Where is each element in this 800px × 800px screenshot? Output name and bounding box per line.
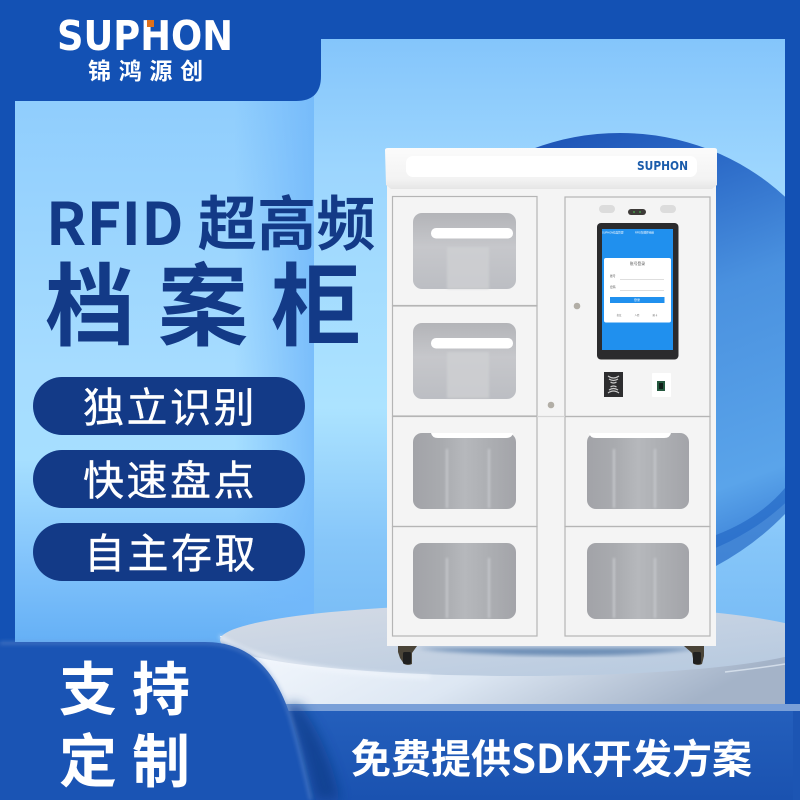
bottom left drawer window — [413, 543, 516, 619]
login dialog: 账号登录 — [630, 261, 645, 267]
cabinet — [385, 148, 717, 665]
bottom banner — [280, 704, 800, 800]
login dialog: 指纹 — [617, 313, 622, 317]
bottom right drawer window — [587, 543, 689, 619]
third left drawer window — [413, 433, 516, 509]
customization label line 1: 支持 — [59, 643, 205, 727]
login dialog: 刷卡 — [653, 313, 658, 317]
cabinet header — [385, 148, 717, 189]
feature pill: fast inventory — [33, 447, 305, 508]
login dialog: 人脸 — [635, 313, 640, 317]
login dialog: 密码 — [610, 285, 616, 289]
login dialog: 账号 — [610, 274, 616, 278]
fingerprint scanner — [652, 373, 671, 397]
touch screen — [597, 223, 678, 360]
logo: SUPHON wordmark: SUPHON — [57, 12, 233, 60]
login dialog: 登录 — [634, 297, 640, 302]
logo: Chinese name: 锦鸿源创 — [88, 52, 211, 86]
door outlines — [392, 196, 710, 636]
cabinet body — [387, 180, 716, 646]
upper left drawer window — [413, 213, 516, 289]
panel: left backdrop — [15, 90, 314, 650]
panel: right backdrop — [314, 39, 785, 709]
feature pill: self-service access — [33, 520, 305, 581]
wheels — [398, 646, 704, 665]
screen header text: RFID智能柜系统 — [635, 230, 654, 234]
screen header text — [602, 230, 654, 234]
screen header text: SUPHON档案管理 — [602, 230, 624, 234]
door locks — [548, 303, 580, 408]
title: RFID line: RFID 超高频 — [46, 177, 376, 262]
feature pill: self-service access: 自主存取 — [84, 520, 258, 580]
second left drawer window — [413, 323, 516, 399]
banner text: 免费提供SDK开发方案 — [351, 727, 752, 785]
login dialog — [604, 258, 671, 322]
customization label line 2: 定制 — [59, 715, 205, 799]
speakers and camera — [599, 205, 676, 215]
panel: logo tab — [0, 0, 321, 101]
third right drawer window — [587, 433, 689, 509]
feature pill: fast inventory: 快速盘点 — [83, 447, 257, 507]
banner shadow — [285, 705, 340, 800]
feature pill: independent recognition: 独立识别 — [83, 374, 257, 434]
RFID reader — [604, 372, 623, 397]
podium — [218, 608, 785, 704]
large blue disc behind cabinet — [535, 133, 785, 566]
title: cabinet line: 档案柜 — [45, 234, 384, 364]
feature pill: independent recognition — [33, 374, 305, 435]
panel: customization tab — [0, 642, 311, 800]
cabinet header: SUPHON — [637, 158, 688, 173]
